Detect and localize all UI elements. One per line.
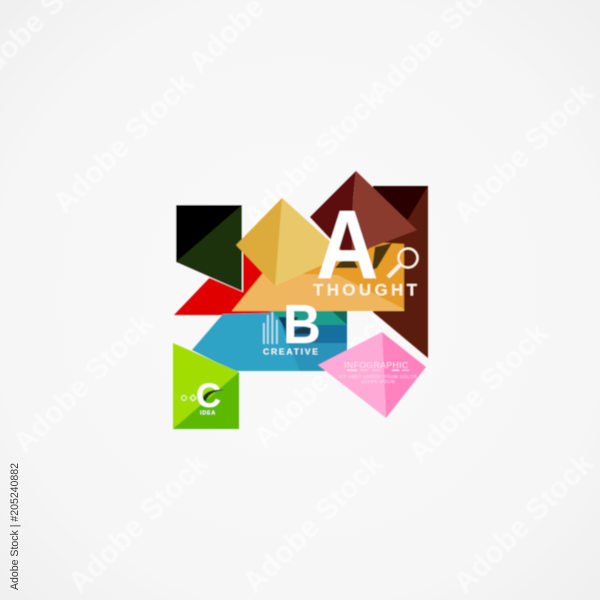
- infographic composition: [173, 171, 428, 429]
- icon: pink pyramid: SEVEN IPSUM: [361, 379, 395, 384]
- letter A: A: [316, 191, 378, 299]
- letter C: C: [196, 377, 221, 415]
- watermark pattern: Adobe Stock: [447, 77, 600, 230]
- watermark pattern: Adobe Stock: [247, 302, 400, 455]
- watermark pattern: Adobe Stock: [237, 447, 390, 600]
- watermark pattern: Adobe Stock: [62, 447, 215, 600]
- panel: blue creative block: [192, 311, 347, 371]
- watermark pattern: Adobe Stock: [402, 317, 555, 470]
- small bars: [347, 370, 409, 371]
- watermark pattern: Adobe Stock: [447, 447, 600, 600]
- label: creative: CREATIVE: [263, 346, 318, 356]
- panel: orange thought band: [232, 240, 404, 311]
- icon: magnifier: [388, 248, 418, 277]
- letter B: B: [283, 294, 321, 355]
- label: idea: IDEA: [200, 410, 216, 416]
- panel: dark pentagon: [175, 204, 243, 292]
- panel: red triangle: [174, 244, 312, 315]
- caption: SIT AMET LOREM IPSUM DOLOR: [339, 374, 417, 379]
- icon: pink pyramid: [318, 332, 426, 418]
- icon: striped bars: [263, 312, 278, 344]
- panel: maroon right block: [373, 186, 428, 358]
- icon: dark swoosh: [203, 390, 224, 401]
- dark swoosh in B: [294, 327, 311, 334]
- label: thought: THOUGHT: [313, 280, 418, 300]
- icon: diamonds: [182, 395, 196, 401]
- watermark pattern: Adobe Stock: [7, 307, 160, 460]
- watermark pattern: Adobe Stock: [237, 82, 390, 235]
- panel: green idea square: [173, 343, 239, 429]
- stock id side label: Adobe Stock | #205240882: [9, 463, 21, 590]
- panel: brown pyramid: [310, 171, 417, 262]
- panel: gold pyramid: [236, 198, 345, 286]
- watermark pattern: Adobe Stock: [47, 67, 200, 220]
- infographic heading: INFOGRAPHIC: [344, 360, 409, 370]
- dark wave in orange band: [335, 243, 392, 270]
